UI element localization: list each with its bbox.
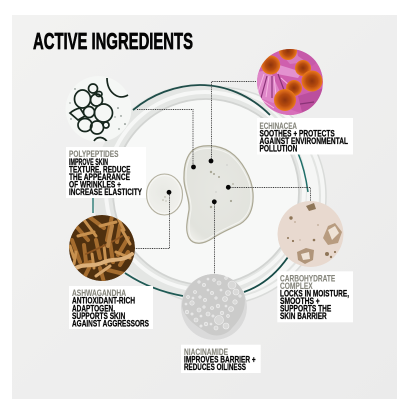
- label: echinacea: SOOTHES + PROTECTS: [260, 128, 335, 138]
- label: echinacea: [257, 118, 353, 154]
- label: echinacea: AGAINST ENVIRONMENTAL: [260, 136, 348, 146]
- image: echinacea flowers: [257, 49, 323, 115]
- label: polypeptides: THE APPEARANCE: [69, 172, 130, 182]
- label: echinacea: POLLUTION: [260, 144, 297, 154]
- label: polypeptides: POLYPEPTIDES: [69, 149, 118, 159]
- label: niacinamide: IMPROVES BARRIER +: [184, 355, 256, 365]
- small serum droplet: [146, 174, 182, 215]
- large serum droplet: [184, 146, 253, 243]
- glass petri dish: [93, 84, 326, 305]
- label: niacinamide: NIACINAMIDE: [184, 347, 228, 357]
- label: ashwagandha: [69, 286, 153, 329]
- connector: ashwagandha: [134, 192, 170, 248]
- image: ashwagandha roots: [69, 215, 135, 282]
- label: carbohydrate complex: LOCKS IN MOISTURE,: [280, 289, 349, 299]
- label: ashwagandha: AGAINST AGGRESSORS: [72, 318, 149, 328]
- label: polypeptides: TEXTURE, REDUCE: [69, 164, 130, 174]
- label: niacinamide: REDUCES OILINESS: [184, 362, 246, 372]
- image: carbohydrate complex crystals: [278, 201, 344, 267]
- label: echinacea: ECHINACEA: [260, 121, 297, 131]
- label: polypeptides: IMPROVE SKIN: [69, 157, 108, 167]
- label: carbohydrate complex: SUPPORTS THE: [280, 304, 331, 314]
- label: carbohydrate complex: SKIN BARRIER: [280, 311, 327, 321]
- label: polypeptides: OF WRINKLES +: [69, 180, 121, 190]
- label: ashwagandha: ANTIOXIDANT-RICH: [72, 296, 135, 306]
- title: ACTIVE INGREDIENTS: [33, 28, 193, 54]
- connector dots: [167, 159, 231, 204]
- label: polypeptides: INCREASE ELASTICITY: [69, 187, 143, 197]
- label: niacinamide: [181, 345, 261, 373]
- label: ashwagandha: SUPPORTS SKIN: [72, 311, 126, 321]
- connector: carbohydrate complex: [228, 188, 310, 203]
- label: carbohydrate complex: COMPLEX: [280, 281, 313, 291]
- label: polypeptides: [66, 147, 146, 198]
- label: carbohydrate complex: SMOOTHS +: [280, 296, 320, 306]
- connector: echinacea: [212, 82, 256, 161]
- image: polypeptides bubbles: [66, 76, 132, 143]
- image: niacinamide foam: [181, 274, 247, 340]
- connector: polypeptides: [137, 110, 193, 167]
- connector: niacinamide: [214, 202, 216, 275]
- label: carbohydrate complex: CARBOHYDRATE: [280, 273, 335, 283]
- label: ashwagandha: ASHWAGANDHA: [72, 288, 126, 298]
- label: ashwagandha: ADAPTOGEN,: [72, 303, 115, 313]
- label: carbohydrate complex: [277, 271, 353, 322]
